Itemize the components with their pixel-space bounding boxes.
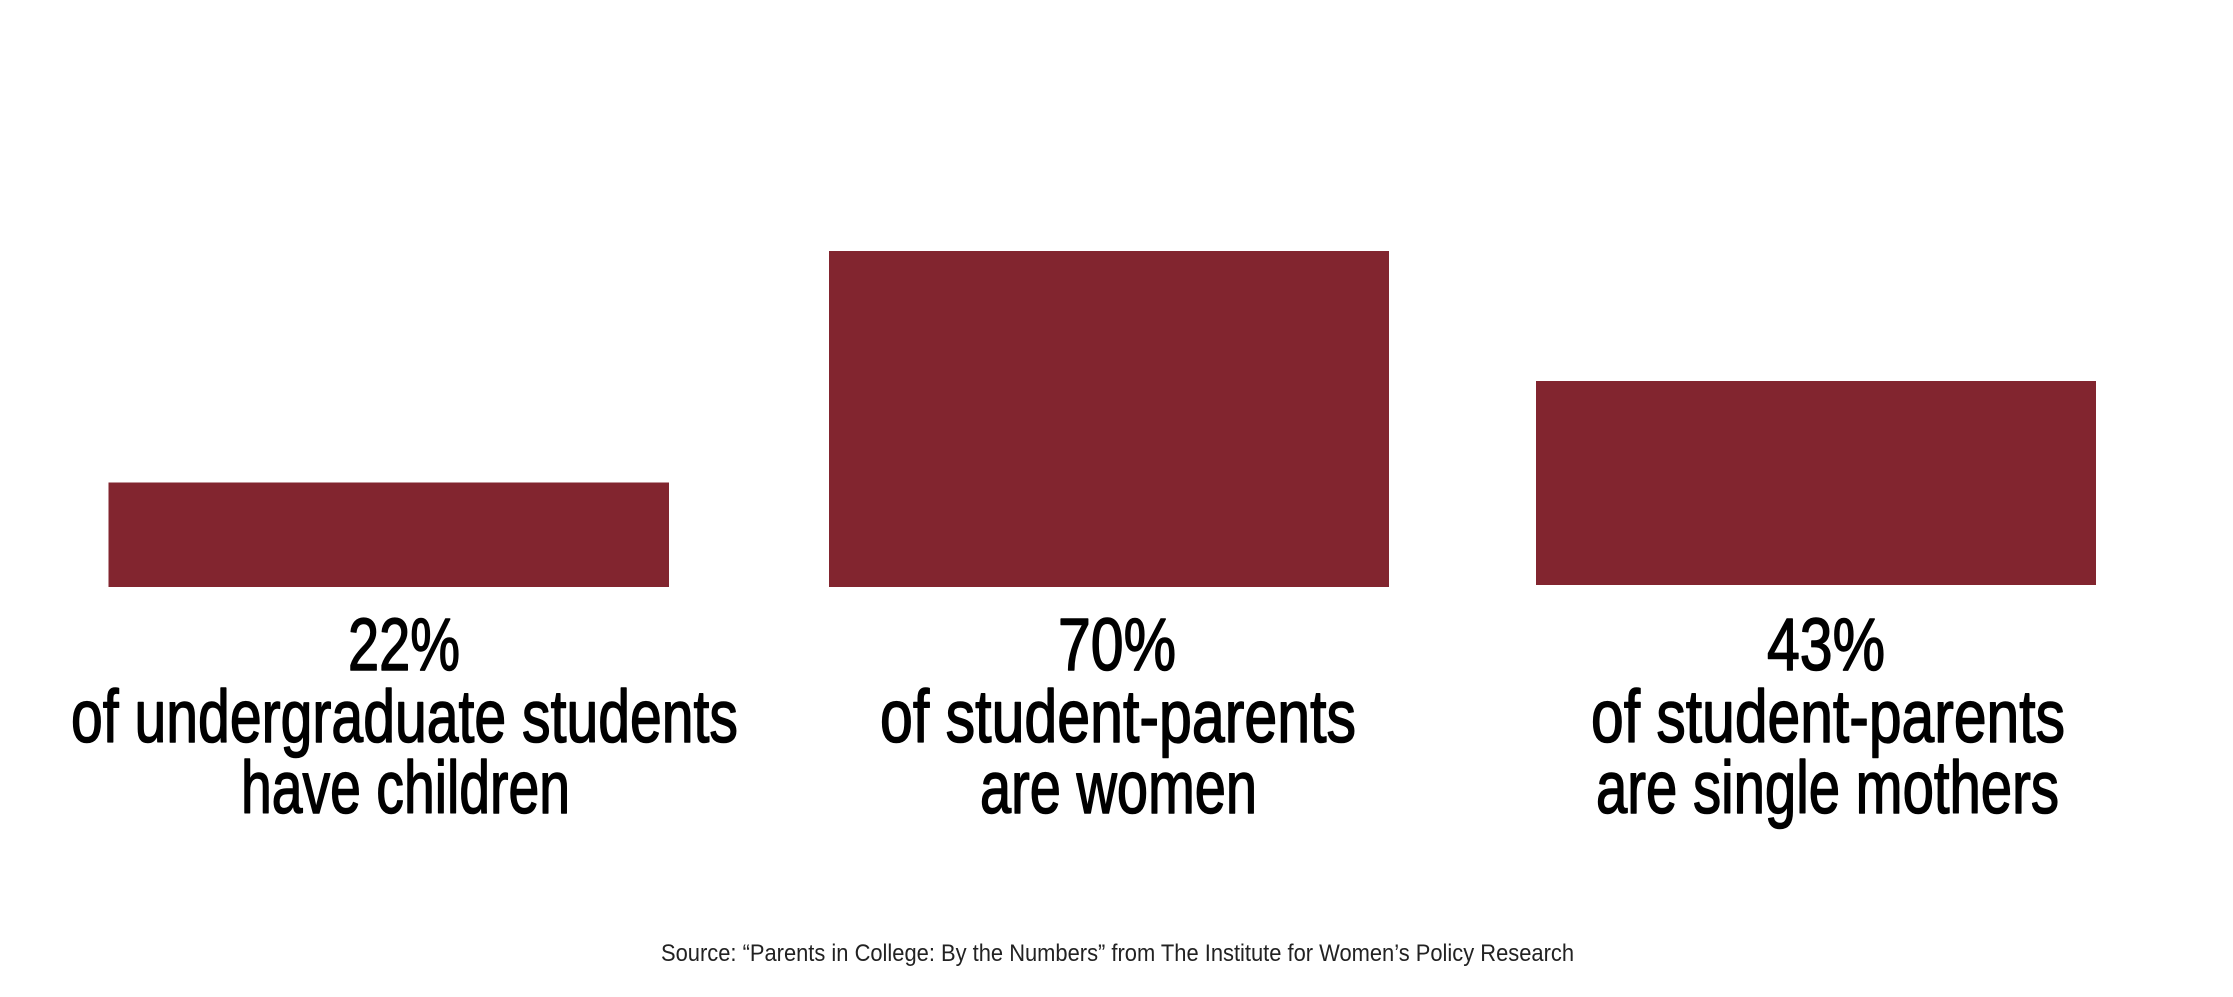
panel: 22% undergraduate students	[71, 482, 738, 829]
label: 70% of student-parents are women: 70%	[1058, 603, 1176, 686]
label: 70% of student-parents are women: of student-parents	[880, 675, 1356, 758]
bar: 22%	[108, 482, 669, 587]
label: 43% of student-parents are single mothers	[1591, 603, 2065, 829]
label: 22% of undergraduate students have children: of undergraduate students	[71, 675, 738, 758]
label: 43% of student-parents are single mothers: are single mothers	[1596, 746, 2059, 829]
label: 22% of undergraduate students have children: have children	[241, 746, 570, 829]
label: 70% of student-parents are women: are women	[980, 746, 1257, 829]
panel: 43% single mothers	[1536, 381, 2096, 829]
panel: 70% women	[829, 251, 1389, 829]
bar: 43%	[1536, 381, 2096, 585]
label: 22% of undergraduate students have children: 22%	[348, 603, 460, 686]
bar: 70%	[829, 251, 1389, 587]
label: 22% of undergraduate students have children	[71, 603, 738, 829]
label: 70% of student-parents are women	[880, 603, 1356, 829]
label: 43% of student-parents are single mothers: 43%	[1767, 603, 1885, 686]
source note: Source: “Parents in College: By the Numbers” from The Institute for Women’s Policy Research	[661, 940, 1574, 967]
label: 43% of student-parents are single mothers: of student-parents	[1591, 675, 2065, 758]
